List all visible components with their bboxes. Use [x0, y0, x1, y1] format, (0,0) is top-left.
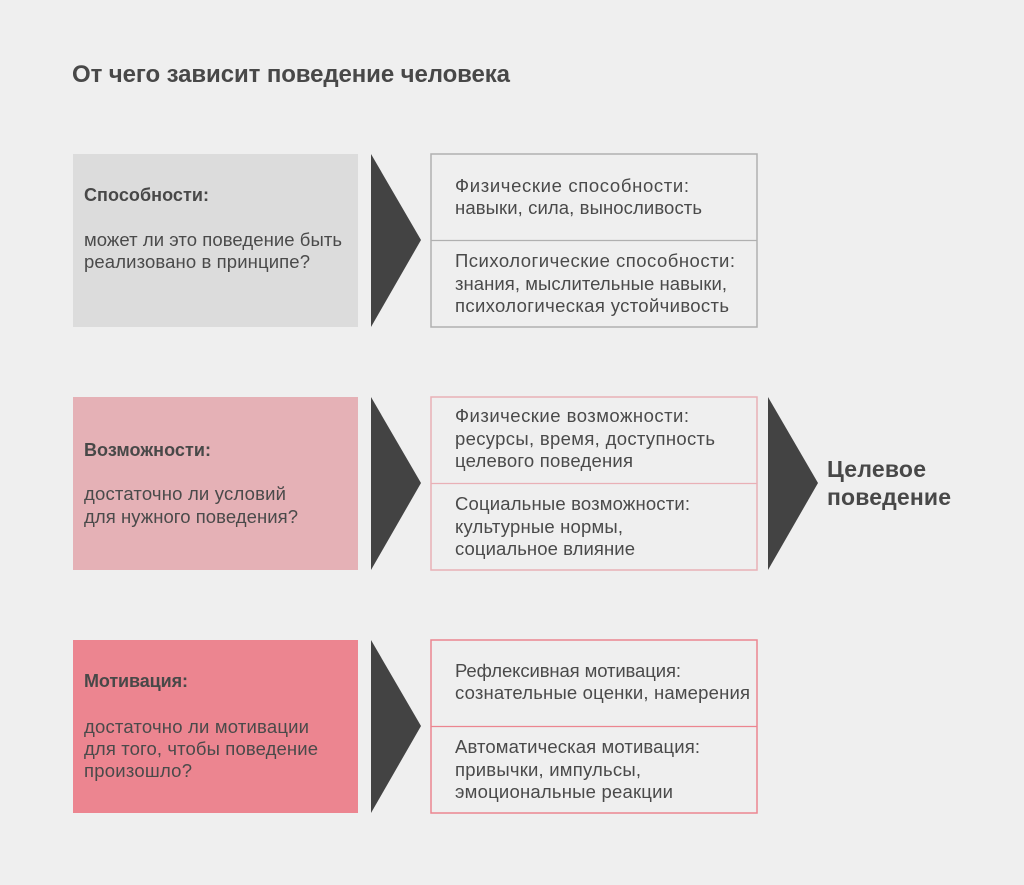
- abilities question box: [73, 154, 358, 327]
- abilities details box: Физические способности:: [455, 175, 689, 196]
- opportunities question box: [73, 397, 358, 570]
- motivation question box: достаточно ли мотивации: [84, 716, 309, 737]
- panel: opportunities row: [73, 397, 757, 570]
- motivation details box: привычки, импульсы,: [455, 759, 641, 780]
- motivation question box: Мотивация:: [84, 671, 188, 691]
- opportunities details box: культурные нормы,: [455, 516, 623, 537]
- abilities details box: [431, 154, 757, 327]
- panel: abilities row: [73, 154, 757, 327]
- opportunities question box: Возможности:: [84, 440, 211, 460]
- abilities details box: навыки, сила, выносливость: [455, 197, 702, 218]
- abilities details box: психологическая устойчивость: [455, 295, 729, 316]
- abilities question box: может ли это поведение быть: [84, 229, 342, 250]
- opportunities details box: ресурсы, время, доступность: [455, 428, 715, 449]
- abilities question box: Способности:: [84, 185, 209, 205]
- opportunities details box: Социальные возможности:: [455, 493, 690, 514]
- target behaviour label: поведение: [827, 484, 951, 510]
- opportunities details box: [431, 397, 757, 570]
- opportunities details box: Физические возможности:: [455, 405, 689, 426]
- motivation details box: сознательные оценки, намерения: [455, 682, 750, 703]
- arrow: abilities: [371, 154, 421, 327]
- arrow: to target behaviour: [768, 397, 818, 570]
- abilities question box: реализовано в принципе?: [84, 251, 310, 272]
- abilities details box: Психологические способности:: [455, 250, 735, 271]
- motivation question box: произошло?: [84, 760, 192, 781]
- motivation details box: эмоциональные реакции: [455, 781, 673, 802]
- opportunities question box: для нужного поведения?: [84, 506, 298, 527]
- target behaviour label: Целевое: [827, 456, 926, 482]
- motivation details box: Рефлексивная мотивация:: [455, 660, 681, 681]
- motivation details box: [431, 640, 757, 813]
- opportunities details box: целевого поведения: [455, 450, 633, 471]
- opportunities question box: достаточно ли условий: [84, 483, 286, 504]
- abilities details box: знания, мыслительные навыки,: [455, 273, 727, 294]
- opportunities details box: социальное влияние: [455, 538, 635, 559]
- panel: motivation row: [73, 640, 757, 813]
- motivation details box: Автоматическая мотивация:: [455, 736, 700, 757]
- arrow: motivation: [371, 640, 421, 813]
- arrow: opportunities: [371, 397, 421, 570]
- title: От чего зависит поведение человека: [72, 61, 511, 88]
- motivation question box: для того, чтобы поведение: [84, 738, 318, 759]
- motivation question box: [73, 640, 358, 813]
- target behaviour label: [827, 456, 951, 510]
